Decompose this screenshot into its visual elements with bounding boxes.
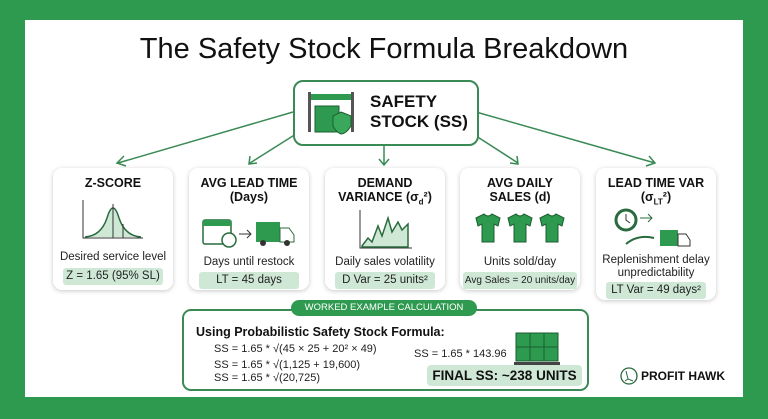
card: lead time var: LT Var = 49 days² [611, 284, 701, 296]
icon: pallet [514, 332, 560, 365]
icon: clock and truck [614, 208, 690, 246]
center box: safety stock [293, 80, 479, 146]
card: z-score: Z-SCORE [85, 176, 141, 190]
card: avg lead time: (Days) [230, 190, 268, 204]
card: demand variance: DEMAND [358, 176, 412, 190]
card: lead time var: (σLT²) [641, 190, 671, 206]
card: z-score: Z = 1.65 (95% SL) [66, 270, 160, 282]
logo: profit hawk: PROFIT HAWK [641, 369, 725, 383]
card: demand variance: D Var = 25 units² [342, 274, 428, 286]
card: z-score [53, 168, 173, 290]
final result [427, 365, 582, 386]
card: avg lead time [189, 168, 309, 290]
worked example box [182, 309, 589, 391]
card: z-score: Desired service level [60, 251, 166, 263]
heading: Using Probabilistic Safety Stock Formula: [196, 325, 445, 339]
card: lead time var: LEAD TIME VAR [608, 176, 704, 190]
card: lead time var: Replenishment delay [602, 254, 710, 266]
icon: calendar to truck [202, 219, 294, 248]
worked example box: SS = 1.65 * 143.96 [414, 348, 507, 360]
icon: shelf with shield [308, 92, 354, 134]
card: avg lead time: LT = 45 days [216, 274, 282, 286]
card: lead time var [596, 168, 716, 300]
card: demand variance: VARIANCE (σd²) [338, 190, 432, 206]
card: avg daily sales: AVG DAILY [487, 176, 553, 190]
title: The Safety Stock Formula Breakdown [140, 33, 628, 65]
formula steps: SS = 1.65 * √(45 × 25 + 20² × 49) [214, 343, 377, 355]
card: demand variance [325, 168, 445, 290]
final result: FINAL SS: ~238 UNITS [432, 368, 577, 383]
center box: safety stock: SAFETY [370, 92, 437, 111]
icon: t-shirts [475, 213, 565, 242]
worked example box: SS = 1.65 * √(20,725) [214, 372, 320, 384]
card: lead time var: unpredictability [618, 267, 694, 279]
icon: volatility chart [360, 210, 412, 248]
center box: safety stock: STOCK (SS) [370, 112, 468, 131]
card: avg daily sales: Units sold/day [484, 256, 556, 268]
worked example box: SS = 1.65 * √(1,125 + 19,600) [214, 359, 360, 371]
card: avg daily sales [460, 168, 580, 290]
icon: bell curve [82, 200, 143, 238]
pill label: WORKED EXAMPLE CALCULATION [305, 302, 463, 313]
pill label [291, 300, 477, 316]
logo: profit hawk [620, 367, 725, 385]
card: avg daily sales: Avg Sales = 20 units/day [465, 275, 575, 286]
card: demand variance: Daily sales volatility [335, 256, 435, 268]
card: avg daily sales: SALES (d) [489, 190, 551, 204]
card: avg lead time: AVG LEAD TIME [200, 176, 298, 190]
card: avg lead time: Days until restock [204, 256, 294, 268]
